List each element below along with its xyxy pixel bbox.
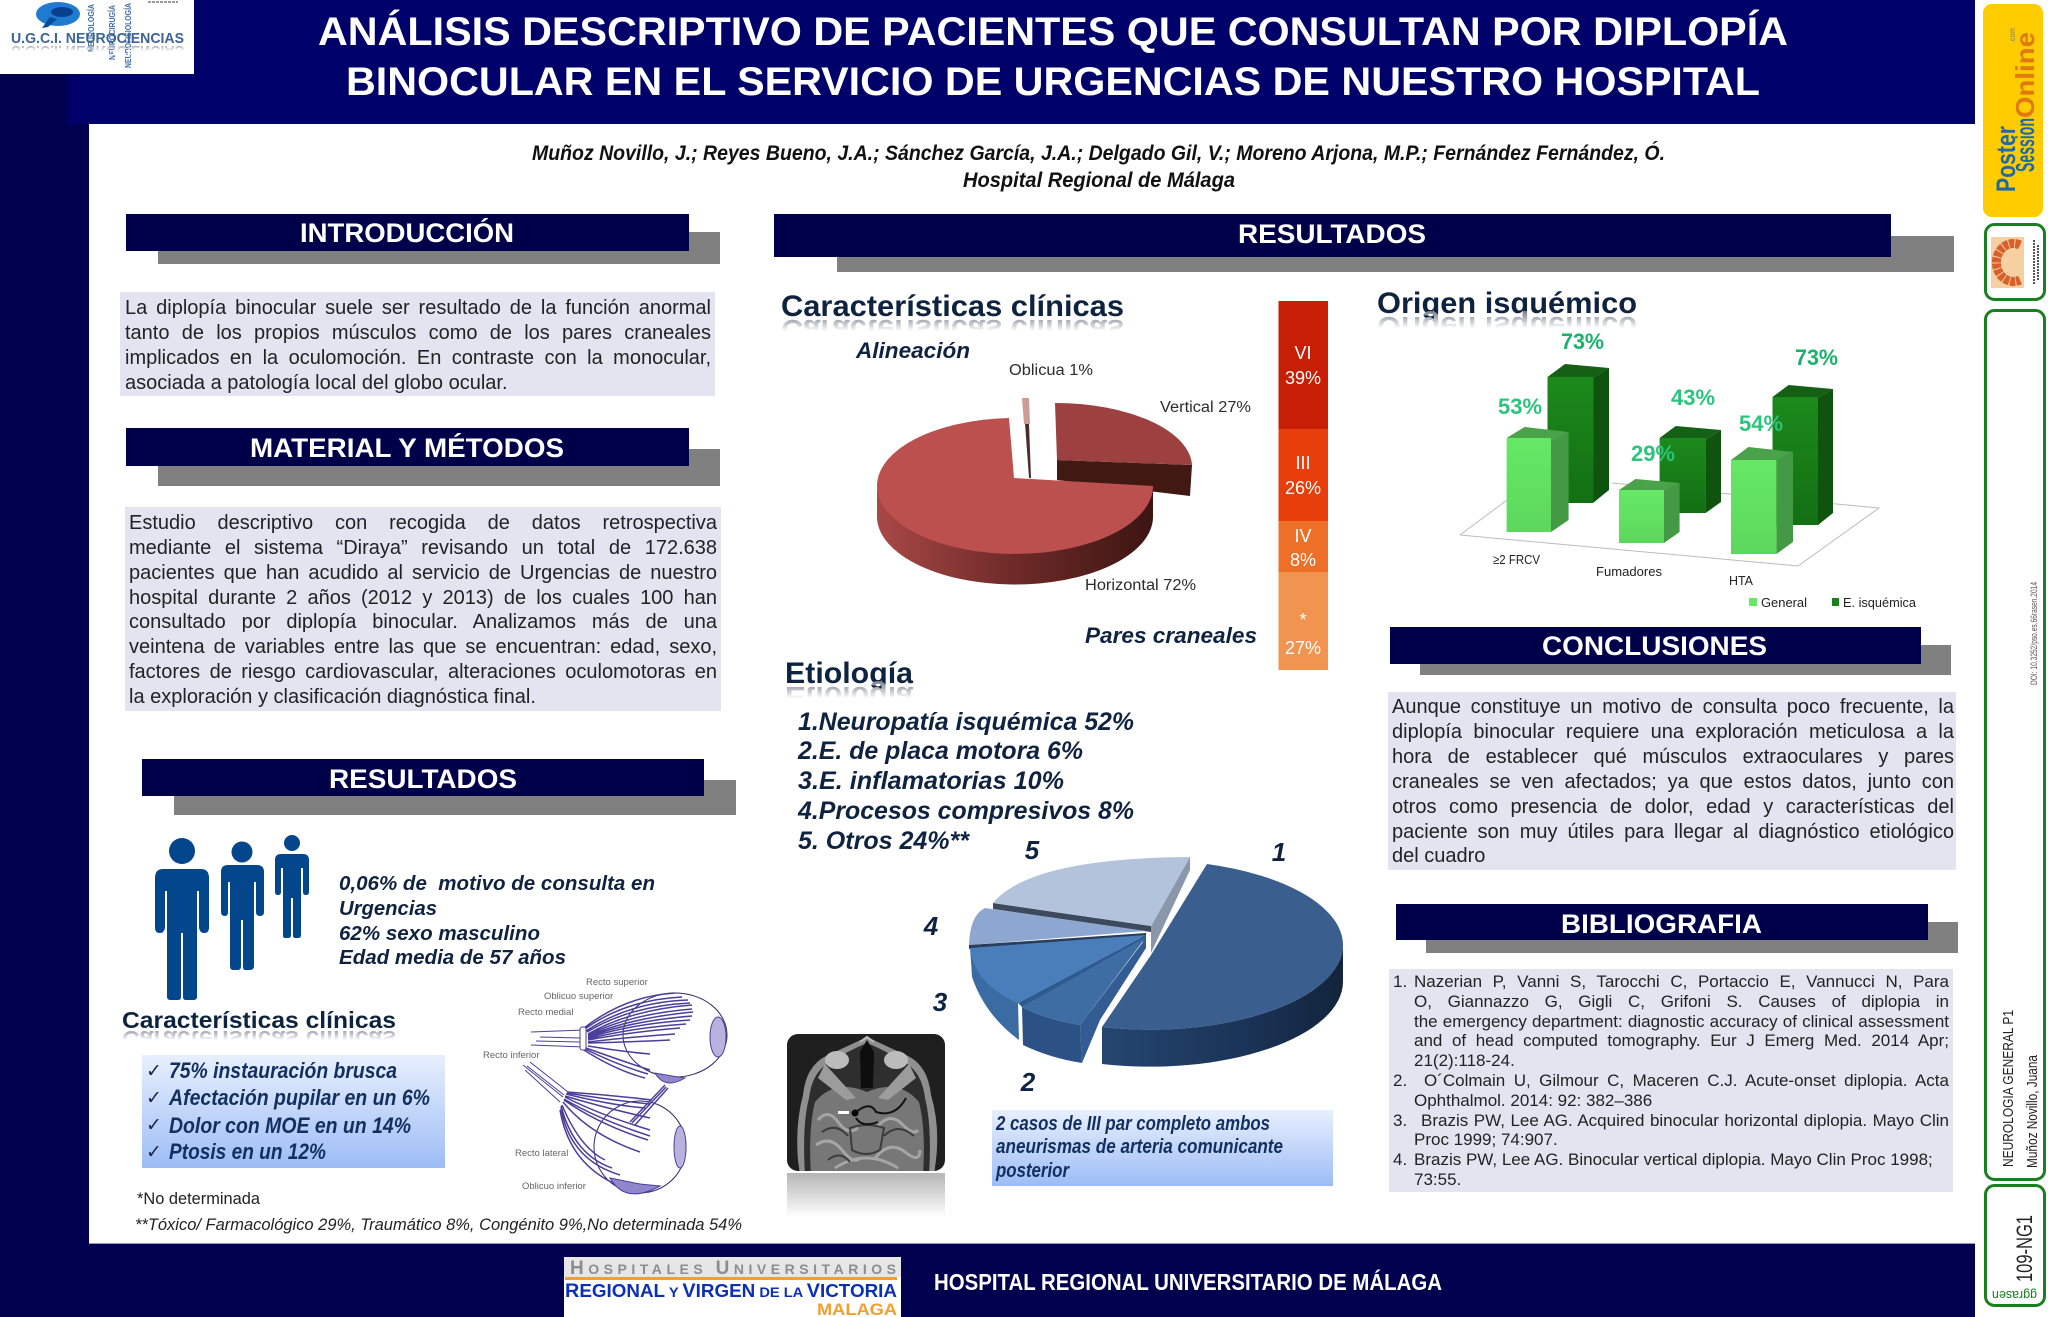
panel: introducción text: implicados en la oculomoción. En contraste con la monocular,: [125, 347, 711, 369]
legend: [1749, 595, 1917, 610]
footer logo: hospitales universitarios: [564, 1257, 901, 1317]
heading: conclusiones: CONCLUSIONES: [1542, 631, 1767, 661]
footer logo: hospitales universitarios: REGIONAL Y VIRGEN DE LA VICTORIA: [565, 1281, 897, 1302]
panel: conclusiones text: hora de establecer qué músculos extraoculares y pares: [1392, 746, 1954, 768]
authors and hospital: Muñoz Novillo, J.; Reyes Bueno, J.A.; Sánchez García, J.A.; Delgado Gil, V.; Moreno Arjona, M.P.; Fernández Fernández, Ó.: [532, 141, 1665, 165]
sidebar: session box: Muñoz Novillo, Juana: [2024, 1054, 2041, 1168]
panel: bibliografía list: and of head computed tomography. Eur J Emerg Med. 2014 Apr;: [1414, 1031, 1949, 1050]
stacked bar: pares craneales: 27%: [1285, 638, 1321, 658]
value labels: 29%: [1631, 441, 1675, 466]
slice numbers: 1: [1272, 837, 1286, 867]
footnotes: *No determinada: [137, 1190, 261, 1208]
left navy column: [0, 0, 89, 1317]
panel: conclusiones text: paciente son muy útiles para llegar al diagnóstico etiológico: [1392, 821, 1954, 843]
callout: clinical list: [142, 1055, 445, 1168]
panel: conclusiones text: diplopía binocular requiere una exploración meticulosa a la: [1392, 721, 1954, 743]
heading: resultados main: RESULTADOS: [1238, 219, 1426, 249]
panel: bibliografía list: O´Colmain U, Gilmour C, Maceren C.J. Acute-onset diplopia. Acta: [1424, 1071, 1949, 1090]
bar chart: origen isquémico: [1460, 329, 1917, 610]
heading: características clínicas left: [122, 1007, 396, 1052]
panel: bibliografía list: Brazis PW, Lee AG. Binocular vertical diplopia. Mayo Clin Proc 1998;: [1414, 1150, 1933, 1169]
heading: características clínicas: [781, 290, 1124, 346]
list: etiología: [797, 708, 1134, 855]
title: BINOCULAR EN EL SERVICIO DE URGENCIAS DE NUESTRO HOSPITAL: [346, 60, 1760, 104]
sidebar: poster session online badge: Session: [2010, 118, 2040, 172]
heading: resultados left: [142, 759, 736, 815]
text: resultados demographics: [339, 873, 655, 969]
pie chart: alineación: Horizontal 72%: [1085, 577, 1196, 594]
heading: características clínicas: Características clínicas: [781, 313, 1124, 346]
text: resultados demographics: Urgencias: [339, 898, 437, 920]
heading: introducción: INTRODUCCIÓN: [300, 217, 514, 248]
logo: U.G.C.I. Neurociencias: U.G.C.I. NEUROCIENCIAS: [11, 42, 184, 59]
title: ANÁLISIS DESCRIPTIVO DE PACIENTES QUE CONSULTAN POR DIPLOPÍA: [318, 9, 1788, 54]
heading: etiología: Etiología: [785, 680, 913, 713]
sidebar: poster code: ggrasen: [1992, 1288, 2037, 1303]
heading: conclusiones: [1390, 627, 1951, 675]
panel: bibliografía list: [1389, 969, 1953, 1192]
logo: U.G.C.I. Neurociencias: U.G.C.I. NEUROCIENCIAS: [11, 30, 184, 47]
text: resultados demographics: 0,06% de motivo de consulta en: [339, 873, 655, 895]
slice 4: [969, 908, 1146, 945]
panel: bibliografía list: Ophthalmol. 2014: 92: 382–386: [1414, 1091, 1652, 1110]
callout: III par: aneurismas de arteria comunicante: [996, 1136, 1283, 1158]
sidebar: session box: NEUROLOGIA GENERAL P1: [2000, 1010, 2017, 1167]
callout: clinical list: Dolor con MOE en un 14%: [169, 1113, 411, 1138]
panel: conclusiones text: del cuadro: [1392, 845, 1485, 867]
slice 5: [993, 857, 1190, 953]
slice 3: [970, 935, 1146, 1040]
panel: conclusiones text: Aunque constituye un motivo de consulta poco frecuente, la: [1392, 696, 1954, 718]
sidebar: session box: [1986, 310, 2044, 1180]
list: etiología: 4.Procesos compresivos 8%: [797, 797, 1134, 825]
muscle labels: Recto inferior: [483, 1050, 540, 1061]
axis labels: Fumadores: [1596, 564, 1663, 579]
panel: bibliografía list: 73:55.: [1414, 1170, 1461, 1189]
slice numbers: [923, 835, 1286, 1097]
heading: material y métodos: MATERIAL Y MÉTODOS: [250, 432, 564, 463]
authors and hospital: [532, 141, 1665, 192]
footer band: [89, 1243, 1975, 1317]
panel: introducción text: La diplopía binocular suele ser resultado de la función anormal: [125, 297, 711, 319]
list: etiología: 3.E. inflamatorias 10%: [798, 767, 1064, 795]
panel: conclusiones text: craneales se ven afectados; ya que estos datos, junto con: [1392, 771, 1954, 793]
panel: bibliografía list: 4.: [1393, 1150, 1407, 1169]
footer: hospital name: HOSPITAL REGIONAL UNIVERSITARIO DE MÁLAGA: [934, 1268, 1442, 1295]
value labels: [1498, 329, 1838, 466]
panel: bibliografía list: 2.: [1393, 1071, 1407, 1090]
image: brain MRI: [787, 1034, 945, 1217]
heading: resultados main: [774, 214, 1954, 272]
muscle labels: Oblicuo inferior: [522, 1181, 586, 1192]
heading: origen isquémico: [1377, 287, 1637, 343]
value labels: 54%: [1739, 411, 1783, 436]
heading: bibliografia: BIBLIOGRAFIA: [1561, 909, 1762, 939]
icon: three people: [155, 835, 309, 1000]
slice 1: [1102, 864, 1343, 1067]
axis labels: HTA: [1729, 573, 1753, 588]
slice numbers: 2: [1020, 1067, 1036, 1097]
panel: material y métodos text: hospital durante 2 años (2012 y 2013) de los cuales 100 han: [129, 587, 717, 609]
callout: clinical list: 75% instauración brusca: [169, 1058, 397, 1083]
list: etiología: 1.Neuropatía isquémica 52%: [798, 708, 1134, 736]
panel: conclusiones text: otros como presencia de dolor, edad y características del: [1392, 796, 1954, 818]
stacked bar: pares craneales: [1278, 301, 1328, 670]
pie chart: alineación: Oblicua 1%: [1009, 362, 1093, 379]
value labels: 43%: [1671, 385, 1715, 410]
legend: E. isquémica: [1843, 595, 1917, 610]
authors and hospital: Hospital Regional de Málaga: [963, 169, 1235, 192]
muscle labels: Recto lateral: [515, 1148, 568, 1159]
panel: material y métodos text: mediante el sistema “Diraya” revisando un total de 172.638: [129, 537, 717, 559]
panel: material y métodos text: [125, 507, 721, 711]
value labels: 73%: [1561, 329, 1604, 354]
header band: [68, 0, 1975, 124]
callout: clinical list: Afectación pupilar en un 6%: [168, 1085, 430, 1110]
list: etiología: 5. Otros 24%**: [798, 827, 970, 855]
text: resultados demographics: 62% sexo masculino: [339, 923, 540, 945]
bars: ≥2 FRCV: [1507, 364, 1609, 532]
stacked bar: pares craneales: 8%: [1290, 550, 1316, 570]
panel: conclusiones text: [1388, 692, 1956, 870]
bars: Fumadores: [1619, 426, 1721, 543]
panel: bibliografía list: 3.: [1393, 1111, 1407, 1130]
heading: resultados left: RESULTADOS: [329, 764, 517, 794]
heading: origen isquémico: Origen isquémico: [1377, 287, 1637, 320]
axis labels: [1493, 552, 1753, 588]
callout: III par: [992, 1110, 1333, 1186]
panel: material y métodos text: la exploración y clasificación diagnóstica final.: [129, 686, 536, 708]
panel: bibliografía list: 1.: [1393, 972, 1407, 991]
heading: etiología: Etiología: [785, 657, 913, 690]
panel: material y métodos text: veintena de variables entre las que se encuentran: edad, sexo,: [129, 636, 717, 658]
title: [318, 9, 1788, 104]
muscle labels: Oblicuo superior: [544, 991, 613, 1002]
heading: material y métodos: [126, 428, 720, 486]
heading: origen isquémico: Origen isquémico: [1377, 310, 1637, 343]
sidebar: poster session online badge: Poster: [1991, 126, 2021, 192]
sidebar: poster code: [1986, 1186, 2044, 1306]
panel: introducción text: tanto de los propios músculos como de los pares craneales: [125, 322, 711, 344]
sidebar: society logo: [1986, 224, 2044, 300]
stacked bar: pares craneales: III: [1295, 453, 1311, 473]
panel: material y métodos text: pacientes que han acudido al servicio de Urgencias de nuestro: [129, 562, 717, 584]
callout: clinical list: ✓: [146, 1141, 162, 1163]
axis labels: ≥2 FRCV: [1493, 552, 1540, 567]
slice numbers: 3: [933, 987, 948, 1017]
panel: material y métodos text: Estudio descriptivo con recogida de datos retrospectiva: [129, 512, 717, 534]
footnotes: **Tóxico/ Farmacológico 29%, Traumático 8%, Congénito 9%,No determinada 54%: [135, 1216, 742, 1234]
stacked bar: pares craneales: VI: [1294, 343, 1312, 363]
stacked bar: pares craneales: 26%: [1285, 478, 1321, 498]
callout: clinical list: ✓: [146, 1087, 162, 1109]
footnotes: [135, 1190, 742, 1234]
panel: bibliografía list: Proc 1999; 74:907.: [1414, 1130, 1558, 1149]
panel: introducción text: [120, 292, 715, 396]
heading: características clínicas: Características clínicas: [781, 290, 1124, 323]
heading: características clínicas left: Características clínicas: [122, 1007, 396, 1033]
muscle labels: Recto superior: [586, 977, 648, 988]
muscle labels: [483, 977, 648, 1192]
panel: bibliografía list: the emergency department: diagnostic accuracy of clinical assessment: [1414, 1012, 1949, 1031]
pie chart: alineación: [877, 362, 1251, 594]
panel: bibliografía list: 21(2):118-24.: [1414, 1051, 1515, 1070]
sidebar: poster code: 109-NG1: [2012, 1215, 2037, 1282]
illustration: extraocular muscles: [483, 977, 727, 1194]
slice 2: [1022, 937, 1146, 1063]
value labels: 53%: [1498, 394, 1542, 419]
legend: General: [1761, 595, 1807, 610]
value labels: 73%: [1795, 345, 1838, 370]
stacked bar: pares craneales: 39%: [1285, 368, 1321, 388]
sidebar: poster session online badge: .com: [2008, 28, 2017, 43]
footer logo: hospitales universitarios: H OSPITALES U NIVERSITARIOS: [570, 1258, 896, 1279]
stacked bar: pares craneales: *: [1299, 610, 1307, 630]
muscle labels: Recto medial: [518, 1007, 573, 1018]
heading: características clínicas left: Características clínicas: [122, 1026, 396, 1052]
pie chart: etiología: [923, 835, 1343, 1097]
bars: HTA: [1731, 385, 1833, 554]
heading: alineación: Alineación: [855, 338, 970, 363]
panel: material y métodos text: consultado por diplopía binocular. Analizamos más de una: [129, 611, 717, 633]
panel: bibliografía list: O, Giannazzo G, Gigli C, Grifoni S. Causes of diplopia in: [1414, 992, 1949, 1011]
logo: U.G.C.I. Neurociencias: [0, 0, 194, 74]
sidebar: poster session online badge: Online: [2010, 32, 2040, 118]
slice numbers: 4: [923, 911, 939, 941]
panel: bibliografía list: Nazerian P, Vanni S, Tarocchi C, Portaccio E, Vannucci N, Para: [1414, 972, 1949, 991]
heading: introducción: [126, 214, 720, 264]
callout: clinical list: ✓: [146, 1114, 162, 1136]
slice numbers: 5: [1025, 835, 1040, 865]
sidebar: poster session online badge: [1983, 4, 2043, 217]
heading: bibliografia: [1396, 904, 1958, 953]
label: pares craneales: Pares craneales: [1085, 623, 1257, 648]
stacked bar: pares craneales: IV: [1294, 526, 1312, 546]
callout: clinical list: ✓: [146, 1060, 162, 1082]
text: resultados demographics: Edad media de 57 años: [339, 947, 566, 969]
panel: material y métodos text: factores de riesgo cardiovascular, alteraciones oculomotoras en: [129, 661, 717, 683]
callout: clinical list: Ptosis en un 12%: [169, 1139, 326, 1164]
callout: III par: posterior: [995, 1160, 1070, 1182]
lower eye: [523, 1062, 686, 1194]
sidebar: session box: DOI: 10.3252/pso.es.66rasen.2014: [2029, 582, 2040, 685]
callout: III par: 2 casos de III par completo ambos: [995, 1113, 1270, 1135]
upper eye: [531, 993, 727, 1083]
panel: introducción text: asociada a patología local del globo ocular.: [125, 372, 508, 394]
heading: etiología: [785, 657, 913, 713]
panel: bibliografía list: Brazis PW, Lee AG. Acquired binocular horizontal diplopia. Mayo Clin: [1421, 1111, 1949, 1130]
reflection: [787, 1173, 945, 1217]
list: etiología: 2.E. de placa motora 6%: [797, 737, 1083, 765]
pie chart: alineación: Vertical 27%: [1160, 399, 1251, 416]
